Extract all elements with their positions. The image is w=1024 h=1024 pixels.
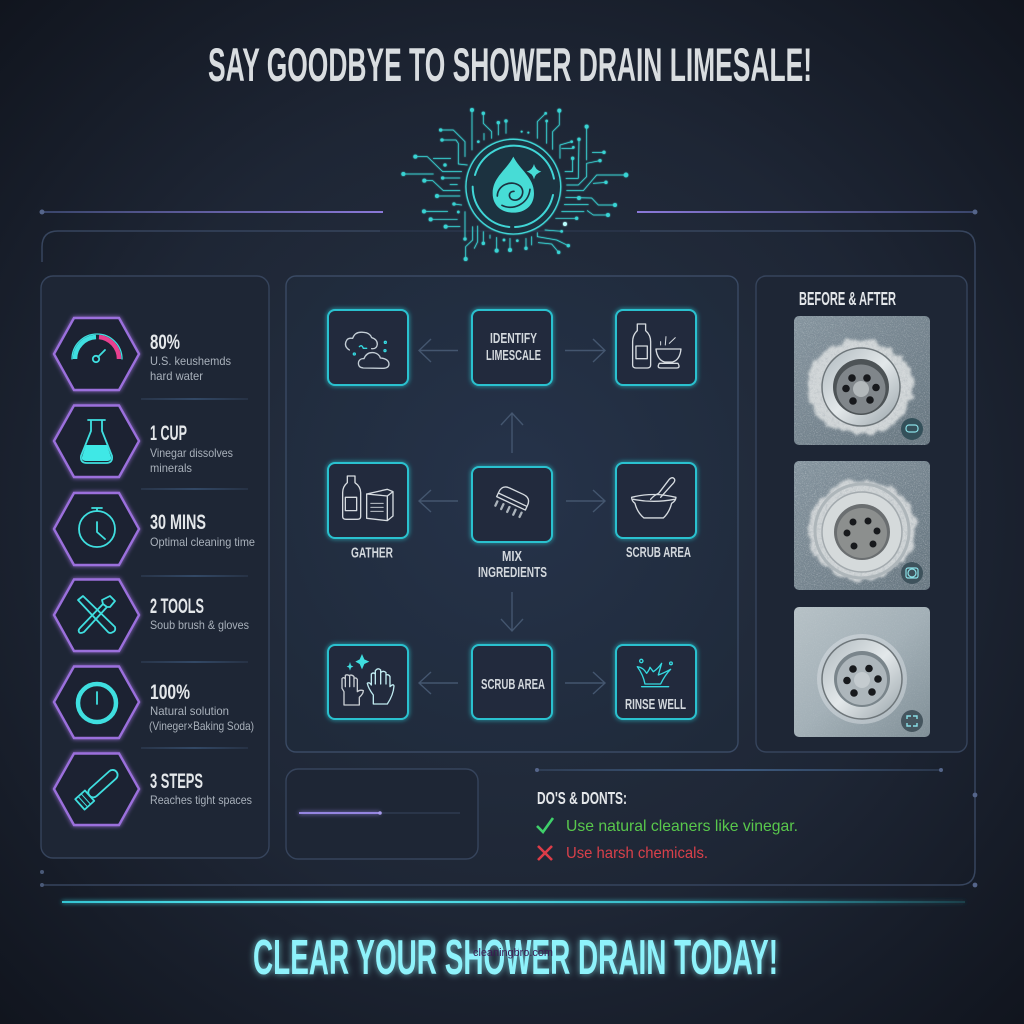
stat: 30 mins xyxy=(54,493,255,576)
stat: 1 cup: 1 CUP xyxy=(150,422,187,445)
stat: 80%: U.S. keushemds xyxy=(150,354,231,368)
icon: cross xyxy=(538,846,552,860)
arrow: right xyxy=(565,339,605,362)
step box: gloves xyxy=(328,645,408,719)
stat: 30 mins: 30 MINS xyxy=(150,511,206,534)
stat: 80%: 80% xyxy=(150,331,180,354)
step box: scrub area bowl: SCRUB AREA xyxy=(626,545,691,561)
step box: identify limescale: LIMESCALE xyxy=(486,348,541,364)
stat: 1 cup: minerals xyxy=(150,461,192,475)
step box: limescale clouds xyxy=(328,310,408,385)
stat: 100%: Natural solution xyxy=(150,704,229,718)
heading: before and after: BEFORE & AFTER xyxy=(799,289,896,309)
header line left xyxy=(40,210,383,214)
step box: scrub area bowl xyxy=(616,463,696,561)
photo: heavy limescale drain xyxy=(794,316,930,445)
outer frame xyxy=(40,231,977,887)
stat: 80%: hard water xyxy=(150,369,203,383)
step box: identify limescale: IDENTIFY xyxy=(490,331,537,347)
icon: check xyxy=(537,818,553,832)
stat: 3 steps: 3 STEPS xyxy=(150,770,203,793)
arrow: left xyxy=(419,490,458,512)
stat: 100%: (Vineger×Baking Soda) xyxy=(149,719,254,733)
stat: 3 steps: Reaches tight spaces xyxy=(150,793,252,807)
step box: mix ingredients: MIX xyxy=(502,549,522,565)
stat: 100%: 100% xyxy=(150,681,190,704)
panel: key facts xyxy=(41,276,269,858)
arrow: up xyxy=(501,413,523,453)
stat: 1 cup xyxy=(54,406,248,489)
icon: circuit water drop emblem xyxy=(401,108,628,261)
arrow: down xyxy=(501,592,523,631)
bottom glow line xyxy=(62,901,965,903)
stat: 2 tools: 2 TOOLS xyxy=(150,595,204,618)
do text: Use natural cleaners like vinegar. xyxy=(566,818,798,835)
stat: 80% xyxy=(54,318,248,399)
step box: scrub area: SCRUB AREA xyxy=(481,677,545,693)
photo: treated drain xyxy=(794,461,930,590)
panel: before and after xyxy=(756,276,967,752)
stat: 2 tools xyxy=(54,580,249,662)
step box: identify limescale xyxy=(472,310,552,385)
watermark: cleaningbro.com xyxy=(473,947,553,959)
divider above do's and don'ts xyxy=(535,768,943,772)
arrow: left xyxy=(419,672,458,694)
panel: process flow xyxy=(286,276,738,752)
step box: rinse well: RINSE WELL xyxy=(625,697,686,713)
arrow: right xyxy=(565,672,605,694)
panel: progress slider xyxy=(286,769,478,859)
arrow: left xyxy=(419,339,458,362)
don't text: Use harsh chemicals. xyxy=(566,845,708,862)
heading: DO'S & DONTS: xyxy=(537,788,627,808)
step box: gather xyxy=(328,463,408,562)
step box: mix ingredients xyxy=(472,467,552,581)
step box: mix ingredients: INGREDIENTS xyxy=(478,565,547,581)
step box: bottle and scale xyxy=(616,310,696,385)
stat: 30 mins: Optimal cleaning time xyxy=(150,535,255,549)
stat: 1 cup: Vinegar dissolves xyxy=(150,446,233,460)
header line right xyxy=(637,210,978,214)
photo: clean drain xyxy=(794,607,930,737)
step box: scrub area xyxy=(472,645,552,719)
panel: do's and don'ts xyxy=(537,788,798,862)
arrow: right xyxy=(566,490,605,512)
stat: 3 steps xyxy=(54,754,252,825)
stat: 2 tools: Soub brush & gloves xyxy=(150,618,249,632)
step box: rinse well xyxy=(616,645,696,719)
step box: gather: GATHER xyxy=(351,546,393,562)
stat: 100% xyxy=(54,666,254,748)
